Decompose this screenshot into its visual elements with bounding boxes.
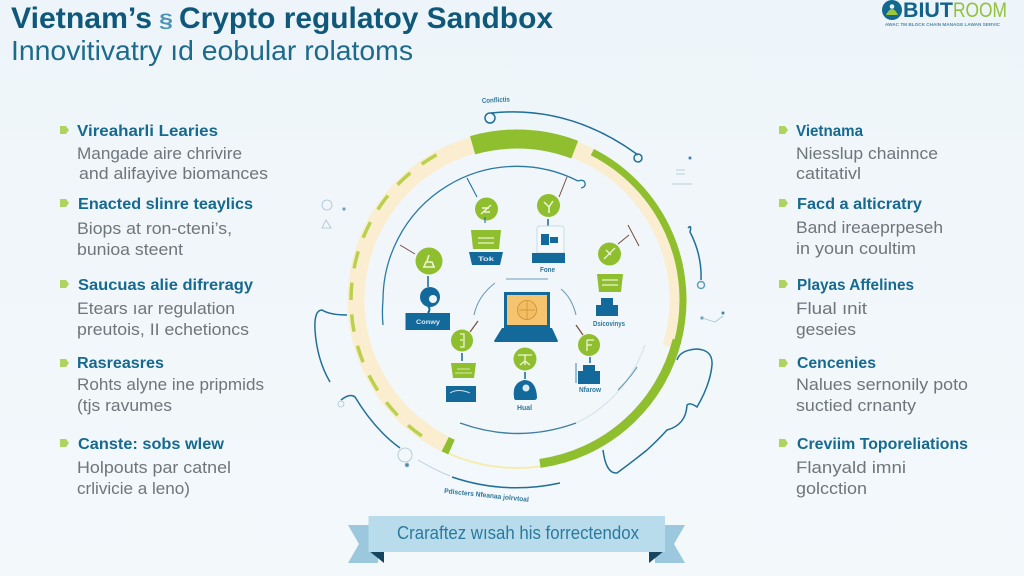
outer ring — [286, 69, 748, 531]
faint connector — [418, 460, 450, 476]
node 1: Tok — [478, 256, 495, 263]
list item 5: crlivicie a leno) — [77, 479, 190, 498]
icon: logo emblem — [882, 0, 902, 20]
node 7: Nfarow — [579, 387, 602, 394]
node 2: Fone — [540, 267, 555, 274]
node 6 — [514, 348, 537, 412]
list item 3: Etears ıar regulation — [77, 299, 235, 318]
banner — [348, 516, 685, 563]
right list panel — [779, 123, 968, 498]
list item 2: Enacted slinre teaylics — [78, 196, 253, 213]
list item 7: Facd a alticratry — [797, 196, 922, 213]
list item 4: (tjs ravumes — [77, 396, 172, 415]
list item 8: Flual ınit — [796, 299, 867, 318]
list item 10: golcction — [796, 479, 867, 498]
decorative labels: Conflictis — [482, 97, 510, 105]
list item 2: bunioa steent — [77, 240, 183, 259]
list item 9: suctied crnanty — [796, 396, 917, 415]
list item 3: preutois, II echetioncs — [77, 320, 249, 339]
list item 5: Holpouts par catnel — [77, 458, 231, 477]
list item 3 — [60, 277, 253, 339]
list item 3: Saucuas alie difreragy — [78, 277, 253, 294]
list item 9 — [779, 355, 968, 415]
list item 8: Playas Affelines — [797, 277, 914, 294]
laptop ring arcs — [474, 279, 576, 315]
central laptop — [494, 292, 558, 342]
title — [11, 2, 553, 35]
list item 7 — [779, 196, 943, 258]
list item 4 — [60, 355, 264, 415]
node 3: Conwy — [416, 319, 440, 326]
list item 6: catitativl — [796, 164, 861, 183]
list item 8 — [779, 277, 914, 339]
list item 2 — [60, 196, 253, 259]
node 6: Hual — [517, 405, 532, 412]
list item 6: Vietnama — [796, 123, 863, 140]
circular diagram — [286, 69, 748, 531]
banner text: Craraftez wısah his forrectendox — [397, 523, 639, 543]
list item 1: Vireaharli Learies — [77, 123, 218, 140]
list item 10 — [779, 436, 968, 498]
thin inner arcs — [382, 166, 645, 434]
left list panel — [60, 123, 268, 498]
title: Vietnam’s — [11, 2, 152, 35]
list item 10: Creviim Toporeliations — [797, 436, 968, 453]
list item 9: Nalues sernonily poto — [796, 375, 968, 394]
list item 9: Cencenies — [797, 355, 876, 372]
banner body — [368, 516, 665, 552]
list item 8: geseies — [796, 320, 856, 339]
list item 6 — [779, 123, 938, 183]
list item 10: Flanyald imni — [796, 458, 906, 477]
node 7 — [576, 325, 602, 394]
list item 4: Rasreasres — [77, 355, 164, 372]
node 5 — [446, 321, 478, 402]
subtitle: Innovitivatry ıd eobular rolatoms — [11, 35, 413, 66]
title: Crypto regulatoy Sandbox — [179, 2, 553, 35]
banner tails — [348, 525, 685, 563]
list item 5: Canste: sobs wlew — [78, 436, 225, 453]
list item 7: in youn coultim — [796, 239, 916, 258]
title: § — [159, 11, 173, 32]
list item 7: Band ireaeprpeseh — [796, 218, 943, 237]
node 3 — [400, 245, 450, 330]
node 1 — [467, 178, 503, 265]
decorative labels — [444, 97, 529, 504]
decorative labels: Pdiscters Nfeanaa jolrvtoal — [444, 488, 529, 504]
outer curves — [315, 112, 712, 488]
list item 6: Niesslup chainnce — [796, 144, 938, 163]
node 2 — [532, 177, 567, 274]
list item 2: Biops at ron-cteni’s, — [77, 219, 232, 238]
list item 1 — [60, 123, 268, 183]
logo: AWAC TM BLOCK CHAIN MANAGE LAWAN SERVIC — [885, 22, 1001, 27]
node 4: Dsicovinys — [593, 321, 625, 328]
list item 1: Mangade aire chrivire — [77, 144, 242, 163]
list item 1: and alifayive biomances — [79, 164, 268, 183]
list item 4: Rohts alyne ine pripmids — [77, 375, 264, 394]
list item 5 — [60, 436, 231, 498]
scattered icons — [322, 156, 724, 467]
logo — [882, 0, 1007, 27]
node 4 — [593, 225, 639, 328]
